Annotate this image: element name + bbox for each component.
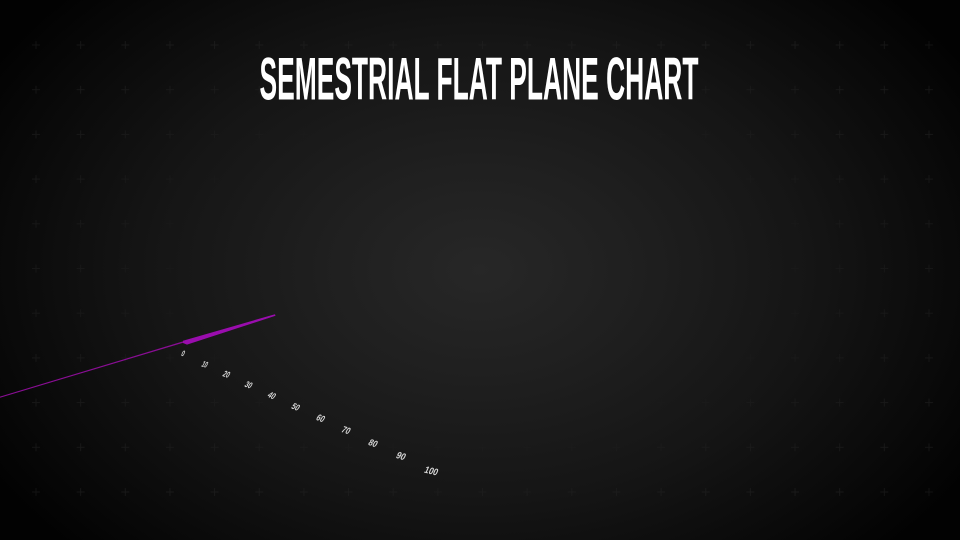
axis labels: 20 — [221, 369, 232, 380]
purple thin line — [0, 341, 184, 398]
axis labels — [180, 349, 440, 478]
axis labels: 40 — [265, 390, 278, 402]
axis labels: 60 — [314, 412, 328, 424]
purple thick bar — [183, 314, 276, 345]
axis labels: 90 — [394, 450, 408, 462]
axis labels: 70 — [339, 424, 353, 436]
axis labels: 50 — [289, 401, 302, 413]
axis labels: 80 — [366, 437, 380, 449]
axis labels: 0 — [180, 349, 186, 359]
chart: flat plane bar in perspective — [0, 314, 276, 398]
axis labels: 10 — [200, 359, 210, 370]
axis labels: 100 — [423, 464, 440, 478]
axis labels: 30 — [243, 379, 255, 391]
